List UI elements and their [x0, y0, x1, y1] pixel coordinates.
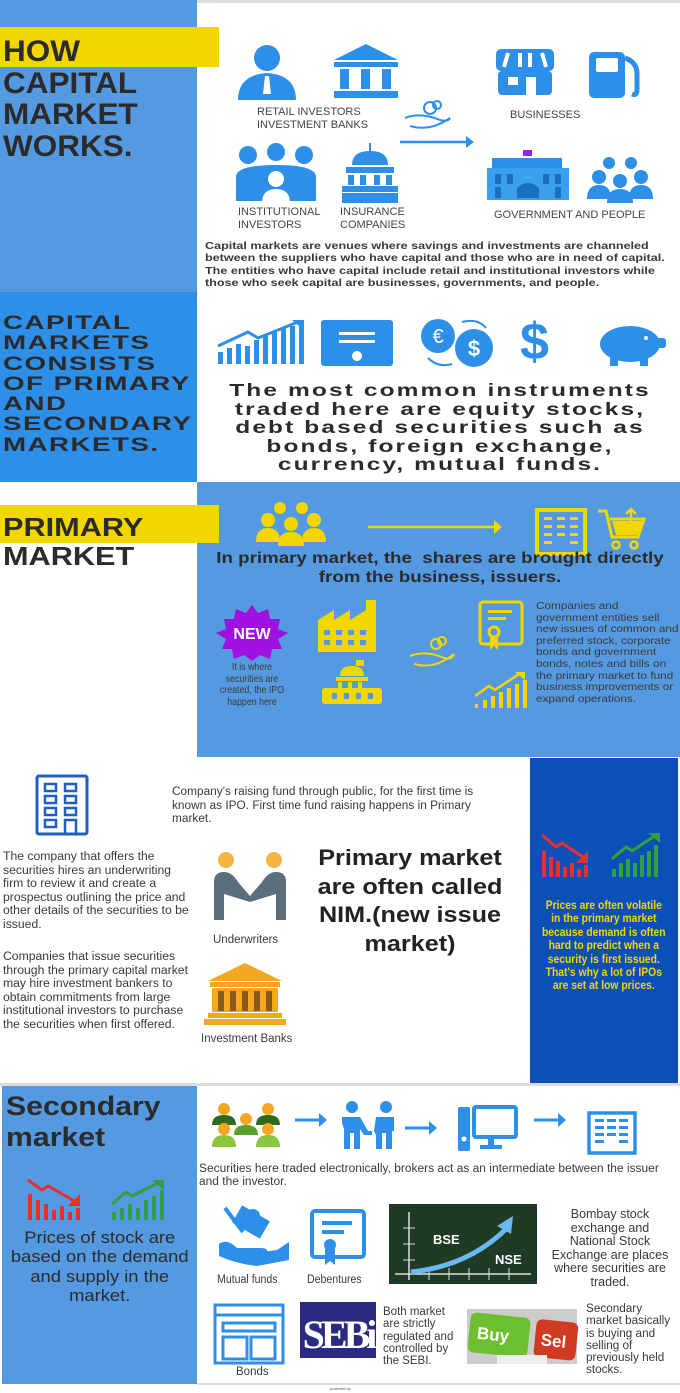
icon: building outline	[36, 774, 88, 836]
icon: traders group	[210, 1101, 284, 1147]
label: underwriters: Underwriters	[213, 934, 278, 946]
panel: primary market	[0, 480, 680, 757]
text: companies sell: government entities sell	[536, 612, 660, 624]
text: investment bankers: institutional investors to purchase	[3, 1005, 183, 1017]
icon: currency exchange: $	[468, 336, 480, 361]
heading: NIM: NIM.(new issue	[319, 902, 501, 927]
text: underwriting: issued.	[3, 918, 42, 930]
text: underwriting: securities hires an underwriting	[3, 864, 171, 876]
title: Secondary	[6, 1091, 161, 1121]
text: primary description: In primary market, the shares are brought directly	[216, 550, 664, 567]
text: prices based on demand: and supply in the	[30, 1267, 169, 1286]
icon: government building	[487, 150, 569, 200]
text: buying selling: stocks.	[586, 1364, 623, 1376]
text: buying selling: selling of	[586, 1340, 632, 1352]
icon: shop	[496, 49, 554, 95]
text: companies sell: the primary market to fund	[536, 670, 673, 682]
text: electronic trading	[199, 1163, 659, 1189]
text: buying selling: previously held	[586, 1352, 664, 1364]
heading: CAPITAL	[3, 313, 131, 334]
text: electronic trading: Securities here traded electronically, brokers act as an intermediate between the issuer	[199, 1163, 659, 1175]
icon: currency exchange	[421, 319, 493, 367]
title	[6, 1091, 161, 1153]
text: BSE NSE: traded.	[591, 1274, 629, 1288]
icon: down chart red	[28, 1178, 84, 1220]
text: description: between the suppliers who have capital and those who are in need of capital.	[205, 253, 665, 264]
text: BSE NSE: where securities are	[554, 1261, 666, 1275]
label: insurance companies	[340, 206, 405, 231]
label: insurance companies: COMPANIES	[340, 219, 405, 231]
icon: people yellow	[256, 502, 326, 546]
text: IPO definition: known as IPO. First time fund raising happens in Primary	[172, 800, 471, 812]
icon: NEW badge	[216, 605, 288, 661]
label: insurance companies: INSURANCE	[340, 206, 405, 218]
text: volatile: are set at low prices.	[553, 980, 655, 992]
text: underwriting: The company that offers the	[3, 851, 155, 863]
text: volatile	[530, 900, 678, 994]
title	[3, 35, 138, 162]
icon: down chart	[542, 833, 594, 877]
heading: NIM: Primary market	[318, 845, 502, 870]
text: investment bankers: the securities when first offered.	[3, 1018, 175, 1030]
panel: IPO / NIM	[3, 758, 678, 1083]
icon: piggy bank	[600, 326, 666, 366]
icon: office building	[587, 1111, 637, 1153]
panel: capital markets consists	[0, 296, 666, 480]
title: HOW	[3, 35, 80, 68]
text: buying selling: Secondary	[586, 1303, 642, 1315]
text: primary description	[216, 550, 664, 586]
text: buying selling	[586, 1303, 670, 1377]
text: SEBI: the SEBI.	[383, 1355, 432, 1367]
image: BSE NSE chart: BSE	[433, 1232, 460, 1247]
text: instruments: The most common instruments	[229, 380, 651, 400]
icon: fuel pump	[589, 52, 640, 98]
arrow	[405, 1121, 439, 1135]
text: volatile: Prices are often volatile	[546, 900, 662, 912]
icon: certificate yellow	[478, 600, 524, 650]
text: description: The entities who have capital include retail and institutional investors while	[205, 266, 655, 277]
heading	[3, 313, 192, 456]
text: BSE NSE: National Stock	[570, 1234, 650, 1248]
text: companies sell: Companies and	[536, 600, 618, 612]
text: investment bankers: through the primary capital market	[3, 964, 188, 976]
title: CAPITAL	[3, 66, 137, 100]
text: companies sell: preferred stock, corporate	[536, 635, 671, 647]
text: underwriting: firm to review it and create a	[3, 878, 156, 890]
panel: volatile prices	[530, 758, 678, 1083]
text: instruments	[229, 380, 651, 474]
text: SEBI: regulated and	[383, 1331, 453, 1343]
title	[3, 512, 143, 571]
title: PRIMARY	[3, 512, 143, 542]
footer: powered by: powered by	[330, 1386, 351, 1391]
label: mutual funds: Mutual funds	[217, 1274, 278, 1286]
heading: AND	[3, 394, 67, 415]
label: debentures: Debentures	[307, 1274, 362, 1286]
label: institutional investors	[238, 206, 321, 231]
title: MARKET	[3, 98, 138, 131]
text: investment bankers: obtain commitments from large	[3, 992, 170, 1004]
image: buy sell keys: Sel	[540, 1330, 567, 1352]
icon: brokers	[340, 1101, 400, 1149]
text: BSE NSE: Exchange are places	[552, 1248, 668, 1262]
heading: CONSISTS	[3, 354, 156, 375]
text: primary description: from the business, issuers.	[319, 569, 561, 586]
heading: NIM: market)	[364, 930, 456, 956]
text: volatile: hard to predict when a	[549, 940, 659, 952]
logo: SEBI: SEBi	[303, 1312, 377, 1357]
icon: people group	[587, 157, 653, 203]
text: investment bankers: Companies that issue securities	[3, 951, 175, 963]
text: volatile: in the primary market	[551, 913, 656, 925]
text: description: those who seek capital are businesses, governments, and people.	[205, 278, 599, 289]
icon: money hand with arrow	[400, 100, 474, 148]
icon: money hand yellow	[410, 636, 455, 667]
icon: certificate	[321, 320, 393, 366]
text: prices based on demand: based on the demand	[11, 1247, 189, 1266]
heading: NIM: are often called	[318, 874, 502, 898]
icon: handshake people	[210, 850, 290, 920]
text: IPO definition: Company's raising fund through public, for the first time is	[172, 786, 473, 798]
text: IPO definition: market.	[172, 813, 211, 825]
icon: debentures	[310, 1209, 366, 1267]
icon: computer	[458, 1105, 518, 1151]
text: BSE NSE: exchange and	[571, 1220, 649, 1234]
text: prices based on demand: Prices of stock are	[24, 1228, 175, 1247]
icon: growth chart	[217, 320, 304, 364]
heading: MARKETS	[3, 333, 150, 354]
text: instruments: currency, mutual funds.	[278, 454, 602, 474]
text: IPO: happen here	[227, 696, 277, 708]
text: IPO	[220, 661, 284, 708]
text: companies sell: business improvements or	[536, 681, 673, 693]
heading: OF PRIMARY	[3, 374, 191, 395]
text: instruments: bonds, foreign exchange,	[266, 436, 614, 456]
icon: retail investor	[238, 45, 296, 100]
text: companies sell: bonds, notes and bills on	[536, 658, 666, 670]
text: investment bankers: may hire investment bankers to	[3, 978, 172, 990]
label: retail investors: RETAIL INVESTORS	[257, 106, 361, 118]
icon: bank	[334, 44, 398, 98]
text: buying selling: is buying and	[586, 1328, 655, 1340]
text: companies sell: bonds and government	[536, 646, 656, 658]
text: BSE NSE: Bombay stock	[571, 1207, 649, 1221]
panel: how capital market works	[0, 0, 680, 296]
text: companies sell: expand operations.	[536, 693, 636, 705]
text: buying selling: market basically	[586, 1315, 670, 1327]
text: investment bankers	[3, 951, 188, 1032]
text: underwriting	[3, 851, 189, 932]
label: institutional investors: INSTITUTIONAL	[238, 206, 321, 218]
image: BSE NSE chart	[389, 1204, 537, 1284]
heading: MARKETS.	[3, 435, 160, 456]
text: SEBI	[383, 1306, 453, 1367]
icon: factory	[318, 600, 376, 652]
text: underwriting: prospectus outlining the price and	[3, 892, 185, 904]
title: WORKS.	[3, 130, 132, 162]
text: IPO definition	[172, 786, 473, 825]
text: prices based on demand: market.	[69, 1286, 130, 1305]
icon: institutional investors	[236, 143, 316, 201]
title: market	[6, 1122, 105, 1152]
icon: bank orange	[204, 963, 286, 1025]
text: volatile: That's why a lot of IPOs	[546, 967, 662, 979]
heading: SECONDARY	[3, 414, 192, 435]
title band	[0, 505, 219, 543]
icon: cart	[598, 507, 646, 550]
text: IPO: It is where	[232, 661, 272, 673]
icon: up chart	[612, 833, 664, 877]
arrow	[295, 1113, 329, 1127]
heading: NIM	[300, 844, 520, 958]
text: IPO: created, the IPO	[220, 684, 284, 696]
text: IPO: securities are	[226, 672, 278, 684]
label: businesses: BUSINESSES	[510, 109, 580, 121]
text: underwriting: other details of the securities to be	[3, 905, 189, 917]
icon: up chart green	[112, 1180, 166, 1220]
text: volatile: security is first issued.	[548, 954, 660, 966]
arrow	[534, 1113, 568, 1127]
text: description	[205, 241, 665, 289]
icon: building	[535, 508, 587, 556]
title: MARKET	[3, 541, 134, 571]
label: government and people: GOVERNMENT AND PEOPLE	[494, 209, 645, 221]
icon: currency exchange: €	[432, 326, 444, 348]
icon: government yellow	[322, 660, 382, 704]
panel: secondary market	[0, 1083, 680, 1385]
image: buy sell keys: Buy	[476, 1324, 511, 1346]
label: institutional investors: INVESTORS	[238, 219, 301, 231]
label: retail investors: INVESTMENT BANKS	[257, 119, 368, 131]
text: instruments: traded here are equity stocks,	[235, 398, 645, 418]
text: SEBI: Both market	[383, 1306, 445, 1318]
title band	[0, 27, 219, 67]
text: electronic trading: and the investor.	[199, 1176, 287, 1188]
image: buy sell keys	[467, 1309, 577, 1364]
icon: mutual funds	[217, 1208, 289, 1266]
arrow	[368, 520, 502, 534]
text: SEBI: are strictly	[383, 1318, 435, 1330]
icon: capitol	[342, 143, 398, 203]
icon: dollar: $	[520, 313, 549, 371]
text: volatile: because demand is often	[542, 927, 666, 939]
text: description: Capital markets are venues where savings and investments are channeled	[205, 241, 649, 252]
text: prices based on demand	[2, 1228, 197, 1305]
icon: NEW badge: NEW	[233, 626, 272, 643]
text: companies sell	[536, 600, 679, 705]
label: investment banks: Investment Banks	[201, 1033, 292, 1045]
text: BSE NSE	[544, 1208, 676, 1289]
label: bonds: Bonds	[236, 1366, 269, 1378]
icon: bonds	[213, 1303, 285, 1365]
icon: growth yellow	[474, 672, 527, 708]
label: retail investors	[257, 106, 368, 131]
text: SEBI: controlled by	[383, 1343, 448, 1355]
text: instruments: debt based securities such as	[235, 417, 645, 437]
image: BSE NSE chart: NSE	[495, 1252, 522, 1267]
text: companies sell: new issues of common and	[536, 623, 679, 635]
